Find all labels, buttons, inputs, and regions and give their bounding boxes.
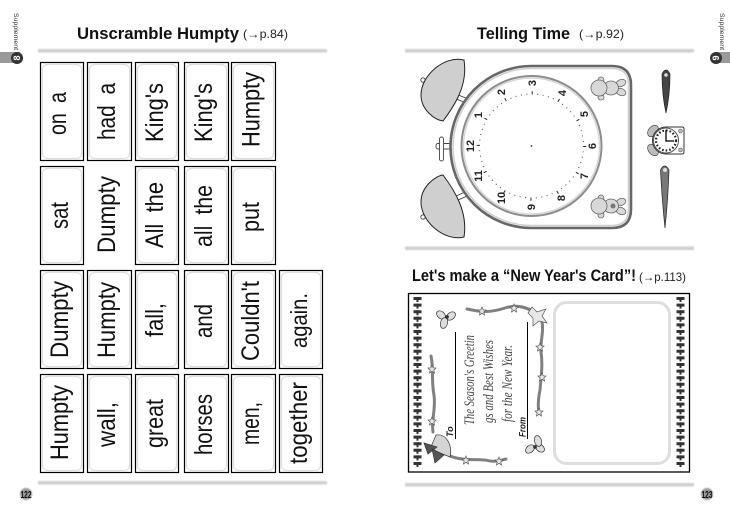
card: wall,: wall,: [93, 402, 121, 448]
heading: New Year's Card: Let's make a “New Year's Card”!: [412, 266, 636, 285]
clock numbers: 4: [557, 89, 569, 96]
heading: Unscramble Humpty: (→p.84): [243, 27, 288, 41]
clock numbers: [465, 80, 599, 210]
word: Dumpty: Dumpty: [93, 176, 121, 253]
card: Humpty: [232, 62, 276, 160]
card: together: together: [285, 382, 313, 464]
alarm clock: [421, 59, 631, 238]
card: put: [232, 166, 276, 264]
card: Couldn't: [232, 270, 276, 368]
garland: bottom left: [428, 356, 506, 465]
card: King's: [136, 62, 178, 160]
card: great: [136, 374, 178, 472]
greeting text: The Season's Greetin: [462, 335, 478, 425]
clock numbers: 7: [579, 173, 591, 179]
card: men,: men,: [237, 402, 265, 445]
heading: Telling Time: (→p.92): [579, 27, 624, 41]
card: fall,: [136, 270, 178, 368]
right supplement tab: [710, 13, 730, 64]
word cards: [40, 62, 322, 472]
From field: [518, 322, 528, 439]
clock numbers: 10: [496, 192, 508, 204]
card: King's: King's: [141, 83, 169, 142]
clock numbers: 12: [465, 140, 477, 152]
card: again.: [280, 270, 322, 368]
card: Humpty: Humpty: [93, 282, 121, 358]
icon: bottom holly: [524, 435, 546, 455]
card: great: great: [141, 399, 169, 448]
clock body inner shading: [453, 68, 628, 226]
icon: minute hand: [660, 166, 669, 228]
left supplement tab: [0, 13, 23, 64]
right flower border: [676, 297, 684, 468]
clock body: [450, 66, 631, 228]
left supplement tab: 8: [12, 55, 22, 61]
From field: From: [518, 417, 528, 437]
card: horses: [184, 374, 228, 472]
card: had a: had a: [93, 83, 121, 140]
card: put: put: [237, 202, 265, 232]
card: and: and: [190, 304, 218, 338]
clock numbers: 6: [587, 143, 599, 149]
clock numbers: 1: [473, 112, 485, 118]
page rules: [38, 49, 694, 486]
card: horses: horses: [190, 394, 218, 455]
card: together: [280, 374, 322, 472]
card: had a: [88, 62, 132, 160]
card: All the: [136, 166, 178, 264]
icon: top bear: [591, 77, 627, 100]
clock numbers: 11: [473, 170, 485, 182]
icon: bell with bow: [424, 435, 451, 463]
page number 122: 122: [20, 490, 32, 501]
page number 122: [20, 488, 32, 501]
left supplement tab: Supplement: [12, 13, 19, 50]
card: All the: All the: [141, 182, 169, 248]
card border: [408, 294, 690, 472]
clock numbers: 8: [556, 195, 568, 201]
card: all the: [184, 166, 228, 264]
card: and: [184, 270, 228, 368]
heading: Telling Time: [477, 24, 624, 43]
clock numbers: 9: [526, 204, 538, 210]
icon: small clock: [645, 123, 684, 158]
icon: top bell: [421, 59, 468, 121]
page number 123: [701, 488, 713, 501]
card: Couldn't: Couldn't: [237, 281, 265, 361]
right supplement tab: 9: [711, 55, 721, 61]
greeting text: [462, 335, 516, 425]
heading: New Year's Card: (→p.113): [639, 270, 686, 284]
left flower border: [414, 297, 422, 468]
card: Dumpty: [40, 270, 84, 368]
icon: top holly: [435, 309, 457, 329]
clock face: [462, 76, 602, 216]
clock numbers: 5: [579, 111, 591, 117]
card: on a: [40, 62, 84, 160]
photo frame: [554, 302, 670, 464]
card: Humpty: Humpty: [238, 72, 266, 147]
card: King's: [184, 62, 228, 160]
heading: Telling Time: Telling Time: [477, 24, 570, 43]
card: Humpty: [88, 270, 132, 368]
right supplement tab: Supplement: [718, 13, 725, 50]
card: King's: King's: [190, 83, 218, 142]
To field: [445, 332, 456, 439]
card: sat: sat: [46, 202, 74, 229]
card: all the: all the: [190, 185, 218, 247]
icon: winder: [436, 137, 452, 161]
garland: top right: [467, 304, 547, 416]
new year card: [408, 294, 690, 472]
icon: bottom bear: [591, 195, 627, 218]
To field: To: [445, 426, 455, 437]
card: on a: on a: [44, 92, 72, 135]
card: Dumpty: Dumpty: [46, 281, 74, 358]
card: men,: [232, 374, 276, 472]
page number 123: 123: [702, 490, 713, 501]
clock numbers: 2: [496, 89, 508, 95]
card: wall,: [88, 374, 132, 472]
greeting text: gs and Best Wishes: [481, 340, 497, 423]
card: again.: again.: [286, 293, 312, 348]
icon: hour hand: [662, 70, 670, 113]
clock numbers: 3: [527, 80, 539, 86]
greeting text: for the New Year.: [500, 345, 516, 422]
icon: bottom bell: [421, 175, 467, 238]
card: Humpty: Humpty: [46, 385, 74, 460]
heading: Unscramble Humpty: Unscramble Humpty: [77, 24, 240, 43]
card: Humpty: [40, 374, 84, 472]
card: sat: [40, 166, 84, 264]
card: fall,: fall,: [141, 303, 169, 337]
